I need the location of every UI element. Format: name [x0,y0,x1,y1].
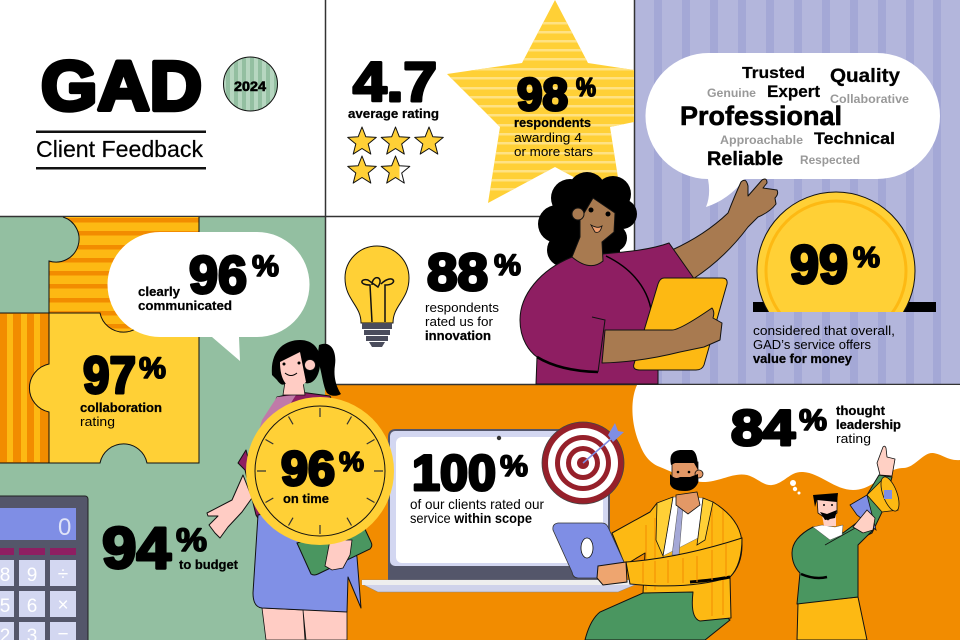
sleeve and top [238,392,340,525]
title: GAD: GAD [41,47,202,125]
puzzle: yellow piece: 97 [83,347,136,405]
white wavy cloud: % [799,404,827,437]
speech bubble: word cloud: Genuine [707,86,756,100]
speech bubble: clearly communicated: 96 [189,246,247,305]
puzzle: orange vertical piece [0,313,50,463]
stat: 88 percent innovation: 88 [427,244,488,302]
coin: 99 percent value for money: value for money [753,352,852,366]
year badge [224,55,278,115]
skirt [253,500,361,612]
legs [262,608,347,640]
head [676,492,700,514]
hair [538,172,637,267]
illustration: man with megaphone [792,446,903,640]
calculator [0,496,88,640]
average rating block: average rating [348,106,439,121]
head [822,512,836,526]
speech bubble: word cloud: Reliable [707,149,783,170]
stat: 94 percent to budget: to budget [179,557,239,572]
hand on megaphone [853,510,875,533]
puzzle: yellow piece [29,313,199,463]
stat: 100 percent within scope: % [500,450,528,483]
stat: 88 percent innovation [425,244,521,343]
hand [597,562,627,585]
calculator: 6 [27,596,37,617]
clock: 96 percent on time: on time [283,491,329,506]
speech bubble: clearly communicated: clearly [138,284,181,299]
ponytail [317,344,341,396]
arm and open hand [207,475,252,538]
big striped star: respondents [514,115,591,130]
puzzle: yellow piece: rating [80,414,115,429]
panel: green background [0,217,326,640]
big striped star [440,0,640,210]
puzzle: orange striped piece [48,216,200,332]
calculator: 9 [27,565,37,586]
speech bubble: clearly communicated: % [252,250,279,283]
speech bubble: clearly communicated: communicated [138,298,232,313]
target icon [542,422,624,504]
stat: 100 percent within scope: 100 [412,445,496,501]
rating stars [348,127,443,183]
shirt and tie [663,497,703,556]
puzzle: yellow piece: collaboration [80,400,162,415]
stat: 88 percent innovation: innovation [425,328,491,343]
illustration: bearded man with laptop [553,450,742,640]
raised arm [672,179,778,279]
thought dots [790,480,800,494]
big striped star: awarding 4 [514,130,582,145]
stat: 88 percent innovation: % [494,249,521,282]
speech bubble: word cloud: Respected [800,153,860,167]
illustration: woman with ponytail [207,340,372,640]
big striped star: or more stars [514,144,594,159]
stat: 94 percent to budget: % [176,522,207,558]
collar [813,525,843,540]
hand on folder [325,540,352,570]
white wavy cloud: leadership [836,417,901,432]
title block [36,47,278,170]
trousers [585,590,730,640]
coin: 99 percent value for money: considered that overall, [753,324,895,338]
calculator: × [57,595,69,616]
speech bubble: word cloud [645,53,940,207]
speech bubble: word cloud: Expert [767,83,821,101]
forearm [626,538,742,586]
clock: 96 percent on time: % [339,446,364,477]
megaphone [850,495,876,530]
jacket [612,502,742,621]
lightbulb icon [345,246,409,347]
puzzle: yellow piece: % [139,352,166,385]
tablet [634,278,727,370]
stat: 94 percent to budget: 94 [102,516,171,581]
sweater [792,518,873,604]
calculator: 5 [0,596,10,617]
folder [297,525,372,575]
year badge: 2024 [234,79,267,94]
white wavy cloud: thought [836,403,886,418]
speech bubble: word cloud: Trusted [742,65,805,82]
average rating block [348,50,443,183]
raised arm sleeve [858,475,892,540]
white wavy cloud: rating [836,431,871,446]
speech bubble: word cloud: Professional [680,101,842,131]
coin: 99 percent value for money: % [853,242,880,274]
illustration: woman with tablet [520,172,778,384]
calculator: 8 [0,565,10,586]
calculator: 0 [58,514,71,541]
stat: 88 percent innovation: rated us for [425,314,494,329]
coin: 99 percent value for money: GAD’s service offers [753,338,871,352]
laptop [362,429,637,592]
head and hair [283,382,305,395]
stat: 100 percent within scope: of our clients rated our [410,496,544,512]
coin: 99 percent value for money [753,192,936,366]
big striped star: % [576,72,596,102]
stat: 100 percent within scope: service within scope [410,510,532,526]
clock: 96 percent on time [246,397,394,545]
speech bubble: word cloud: Collaborative [830,94,909,106]
neck and face [572,198,615,266]
stat: 100 percent within scope [410,445,544,526]
coin: 99 percent value for money: 99 [790,235,848,295]
panel: orange background [325,385,960,640]
average rating block: 4.7 [353,50,437,113]
forearm and hand [602,308,722,363]
speech bubble: word cloud: Technical [814,130,895,148]
trousers [797,597,867,640]
speech bubble: word cloud: Approachable [720,133,803,147]
stat: 94 percent to budget [102,516,239,581]
speech bubble: word cloud: Quality [830,66,900,87]
raised hand [877,446,895,476]
panel: lilac striped background [635,0,960,385]
big striped star: 98 [517,69,568,120]
white wavy cloud [632,385,960,494]
calculator: ÷ [58,564,68,585]
clock: 96 percent on time: 96 [281,443,335,496]
coin slot [753,302,936,312]
stat: 88 percent innovation: respondents [425,300,500,315]
white wavy cloud: 84 [731,400,795,456]
tablet computer [553,523,624,578]
torso [520,243,695,384]
subtitle: Client Feedback [36,136,203,162]
speech bubble: clearly communicated [108,232,310,361]
